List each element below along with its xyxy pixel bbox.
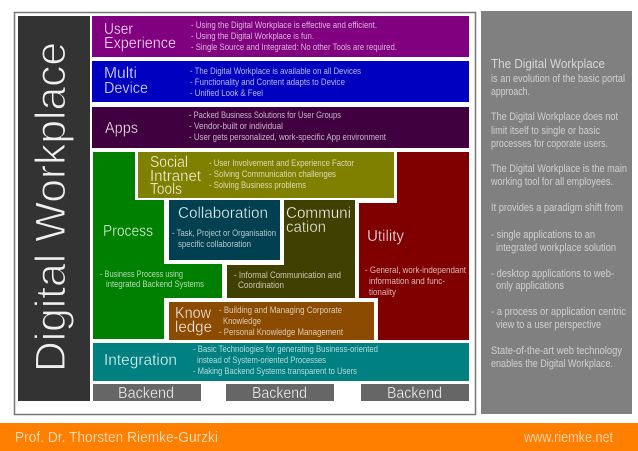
side panel: explanation text: enables the Digital Workplace. (491, 358, 613, 370)
panel: User Experience: - Using the Digital Workplace is fun. (191, 31, 314, 41)
side panel: explanation text: The Digital Workplace does not (491, 111, 618, 123)
panel: Multi Device: Device (104, 80, 148, 97)
panel: Social Intranet Tools (138, 152, 394, 198)
panel: Utility: information and func- (369, 276, 445, 286)
panel: Collaboration: - Task, Project or Organisation (172, 228, 276, 238)
side panel: explanation text: only applications (496, 280, 565, 292)
panel: Communication: cation (286, 219, 326, 236)
panel: Communication: Coordination (238, 280, 284, 290)
panel: Integration: - Basic Technologies for generating Business-oriented (193, 344, 378, 354)
side panel: explanation text: - single applications to an (491, 229, 595, 241)
panel: User Experience (92, 16, 469, 57)
panel: Communication: - Informal Communication and (234, 270, 341, 280)
panel: Process: - Business Process using (100, 269, 183, 279)
side panel: explanation text: - desktop applications to web- (491, 268, 614, 280)
panel: Utility: - General, work-independant (365, 265, 466, 275)
side panel: explanation text: State-of-the-art web technology (491, 345, 623, 357)
panel: Apps: - Packed Business Solutions for User Groups (189, 110, 341, 120)
panel: Utility (359, 152, 469, 340)
panel: Collaboration (169, 200, 280, 260)
panel: Apps (92, 107, 469, 148)
backend block right: Backend (387, 385, 442, 402)
panel: Apps: - Vendor-built or individual (189, 121, 283, 131)
side panel: explanation text: processes for coporate users. (491, 138, 608, 150)
footer bar: Prof. Dr. Thorsten Riemke-Gurzki (15, 430, 218, 446)
side panel: explanation text: integrated workplace solution (496, 242, 616, 254)
side panel: explanation text: working tool for all employees. (490, 176, 613, 188)
panel: User Experience: Experience (104, 35, 176, 52)
panel: Communication (227, 200, 355, 298)
panel: Social Intranet Tools: - Solving Business problems (209, 180, 306, 190)
panel: Integration: Integration (104, 352, 177, 369)
backend block centre (226, 384, 334, 402)
side panel: explanation text (481, 11, 632, 414)
panel: Multi Device (92, 61, 469, 102)
panel: Process (93, 152, 222, 339)
panel: User Experience: User (104, 21, 133, 38)
panel: Social Intranet Tools: - User Involvement and Experience Factor (209, 158, 354, 168)
backend block left: Backend (118, 385, 174, 402)
panel: Process: Process (103, 223, 153, 240)
side panel: explanation text: limit itself to single or basic (491, 125, 600, 137)
vertical title panel: Digital Workplace: Digital Workplace (27, 42, 75, 372)
panel: Utility: tionality (369, 287, 396, 297)
panel: Integration: - Making Backend Systems transparent to Users (193, 366, 357, 376)
panel: Integration (93, 343, 469, 381)
panel: User Experience: - Using the Digital Workplace is effective and efficient. (191, 20, 377, 30)
panel: Social Intranet Tools: - Solving Communication challenges (209, 169, 336, 179)
panel: Multi Device: - Unified Look & Feel (190, 88, 263, 98)
panel: Knowledge: Know (175, 305, 212, 322)
side panel: explanation text: view to a user perspective (496, 319, 601, 331)
panel: Knowledge: - Building and Managing Corporate (219, 305, 342, 315)
panel: Multi Device: Multi (104, 65, 137, 82)
panel: Process: integrated Backend Systems (106, 279, 204, 289)
panel: Integration: instead of System-oriented Processes (197, 355, 326, 365)
backend block right (361, 384, 469, 402)
side panel: explanation text: The Digital Workplace (491, 57, 605, 71)
backend block left (93, 384, 201, 402)
panel: Collaboration: specific collaboration (178, 239, 251, 249)
panel: Knowledge: Knowledge (223, 316, 261, 326)
panel: Collaboration: Collaboration (178, 205, 268, 222)
side panel: explanation text: approach. (491, 86, 530, 98)
panel: Utility: Utility (367, 228, 404, 245)
panel: Multi Device: - The Digital Workplace is available on all Devices (190, 66, 361, 76)
backend block centre: Backend (252, 385, 307, 402)
main diagram frame (14, 12, 476, 414)
panel: Social Intranet Tools: Intranet (150, 168, 202, 185)
panel: User Experience: - Single Source and Integrated: No other Tools are required. (191, 42, 397, 52)
panel: Communication: Communi (286, 205, 351, 222)
panel: Social Intranet Tools: Tools (150, 181, 182, 198)
panel: Multi Device: - Functionality and Content adapts to Device (190, 77, 345, 87)
panel: Apps: - User gets personalized, work-specific App environment (189, 132, 386, 142)
panel: Apps: Apps (105, 120, 138, 137)
panel: Knowledge: ledge (175, 319, 212, 336)
footer bar (0, 423, 638, 451)
footer bar: www.riemke.net (523, 430, 613, 446)
vertical title panel: Digital Workplace (18, 16, 90, 401)
panel: Knowledge (169, 302, 374, 340)
panel: Social Intranet Tools: Social (150, 154, 188, 171)
panel: Knowledge: - Personal Knowledge Management (219, 327, 343, 337)
